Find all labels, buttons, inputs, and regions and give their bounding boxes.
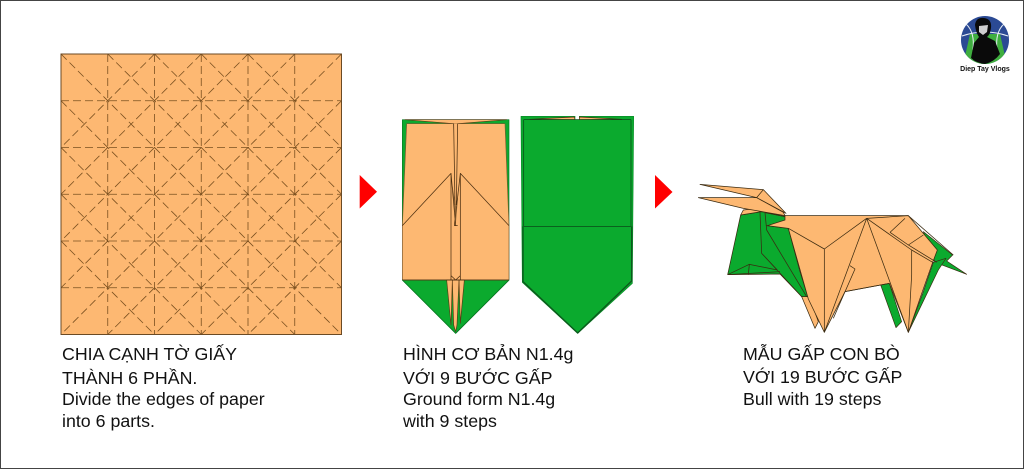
caption: bull bbox=[743, 343, 902, 409]
arrow: step two to three bbox=[655, 175, 672, 208]
caption: bull: Bull with 19 steps bbox=[743, 389, 881, 409]
panel: square paper crease pattern bbox=[61, 54, 342, 334]
bull small front leg bbox=[802, 297, 818, 328]
caption: ground form: VỚI 9 BƯỚC GẤP bbox=[403, 367, 552, 388]
bull horns bbox=[698, 184, 786, 216]
panel: ground form front view bbox=[402, 120, 509, 333]
caption: ground form: HÌNH CƠ BẢN N1.4g bbox=[403, 343, 573, 364]
caption: divide edges: CHIA CẠNH TỜ GIẤY bbox=[62, 343, 237, 364]
panel: ground form back view bbox=[521, 115, 634, 333]
logo: Diep Tay Vlogs: Diep Tay Vlogs bbox=[960, 66, 1010, 73]
bull fold lines bbox=[788, 216, 953, 332]
arrow: step one to two bbox=[360, 175, 377, 208]
caption: divide edges: THÀNH 6 PHẦN. bbox=[62, 367, 197, 388]
bull green tail and hind leg bbox=[881, 232, 967, 332]
caption: ground form: Ground form N1.4g bbox=[403, 389, 555, 409]
caption: ground form: with 9 steps bbox=[402, 411, 497, 431]
bull orange body bbox=[767, 216, 937, 332]
bull green head bbox=[728, 212, 808, 298]
panel: origami bull bbox=[698, 184, 967, 332]
logo: Diep Tay Vlogs bbox=[960, 16, 1010, 73]
caption: divide edges: Divide the edges of paper bbox=[62, 389, 265, 409]
caption: bull: VỚI 19 BƯỚC GẤP bbox=[743, 366, 902, 387]
caption: bull: MẪU GẤP CON BÒ bbox=[743, 343, 900, 364]
caption: divide edges: into 6 parts. bbox=[62, 411, 155, 431]
caption: divide edges bbox=[62, 343, 265, 431]
caption: ground form bbox=[402, 343, 573, 431]
